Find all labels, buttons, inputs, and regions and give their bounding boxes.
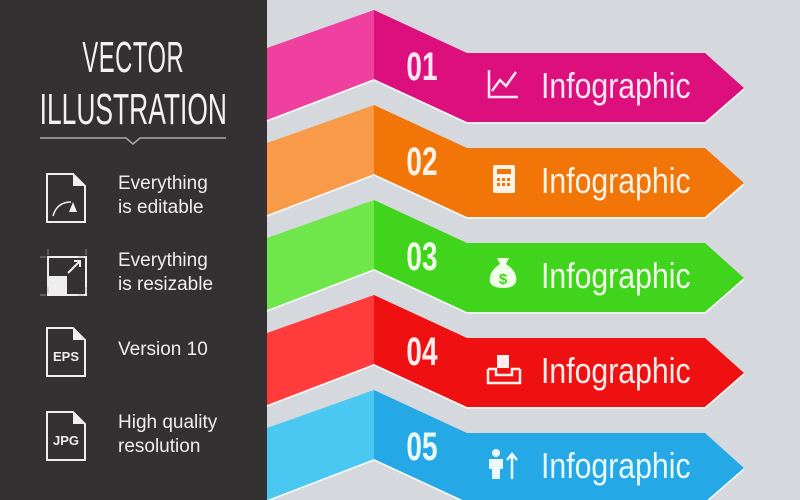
icon: EPS file: EPS: [53, 349, 79, 364]
ribbon 01: [267, 10, 744, 123]
icon: JPG file: [46, 411, 86, 461]
icon: calculator: [493, 165, 515, 193]
text: Everything: [118, 250, 208, 271]
text: Version 10: [118, 339, 208, 360]
icon: resize: [40, 249, 87, 296]
text: resolution: [118, 436, 200, 457]
icon: chart: [489, 70, 518, 97]
ribbon 01: 01: [406, 45, 438, 89]
ribbon 02: [267, 105, 744, 218]
icon: file with pen: [46, 173, 86, 223]
text: High quality: [118, 412, 217, 433]
text: is resizable: [118, 274, 213, 295]
text: [118, 173, 208, 218]
icon: inbox: [488, 369, 520, 383]
ribbon 02: 02: [406, 140, 438, 184]
ribbon 03: $: [499, 271, 508, 288]
feature: JPG: [46, 411, 218, 461]
left panel: [0, 0, 267, 500]
icon: person with arrow: [492, 449, 500, 457]
icon: EPS file: [46, 327, 86, 377]
ribbon 05: 05: [406, 425, 438, 469]
feature: editable: [46, 173, 208, 223]
icon: JPG file: JPG: [53, 433, 79, 448]
feature: resizable: [40, 249, 213, 296]
ribbon 04: [267, 295, 744, 408]
feature: EPS: [46, 327, 208, 377]
text: Everything: [118, 173, 208, 194]
ribbon 05: Infographic: [541, 447, 691, 487]
ribbon 01: Infographic: [541, 67, 691, 107]
title: illustration: ILLUSTRATION: [40, 85, 227, 134]
ribbon 03: [267, 200, 744, 313]
icon: money bag: [490, 258, 516, 288]
text: [118, 250, 213, 295]
ribbon 04: Infographic: [541, 352, 691, 392]
title: vector: VECTOR: [82, 33, 184, 82]
ribbon 03: 03: [406, 235, 438, 279]
ribbon 05: [267, 390, 744, 500]
ribbon 04: 04: [406, 330, 438, 374]
ribbon 02: Infographic: [541, 162, 691, 202]
text: is editable: [118, 197, 204, 218]
text: [118, 412, 218, 457]
ribbon 03: Infographic: [541, 257, 691, 297]
divider with notch: [40, 137, 226, 145]
